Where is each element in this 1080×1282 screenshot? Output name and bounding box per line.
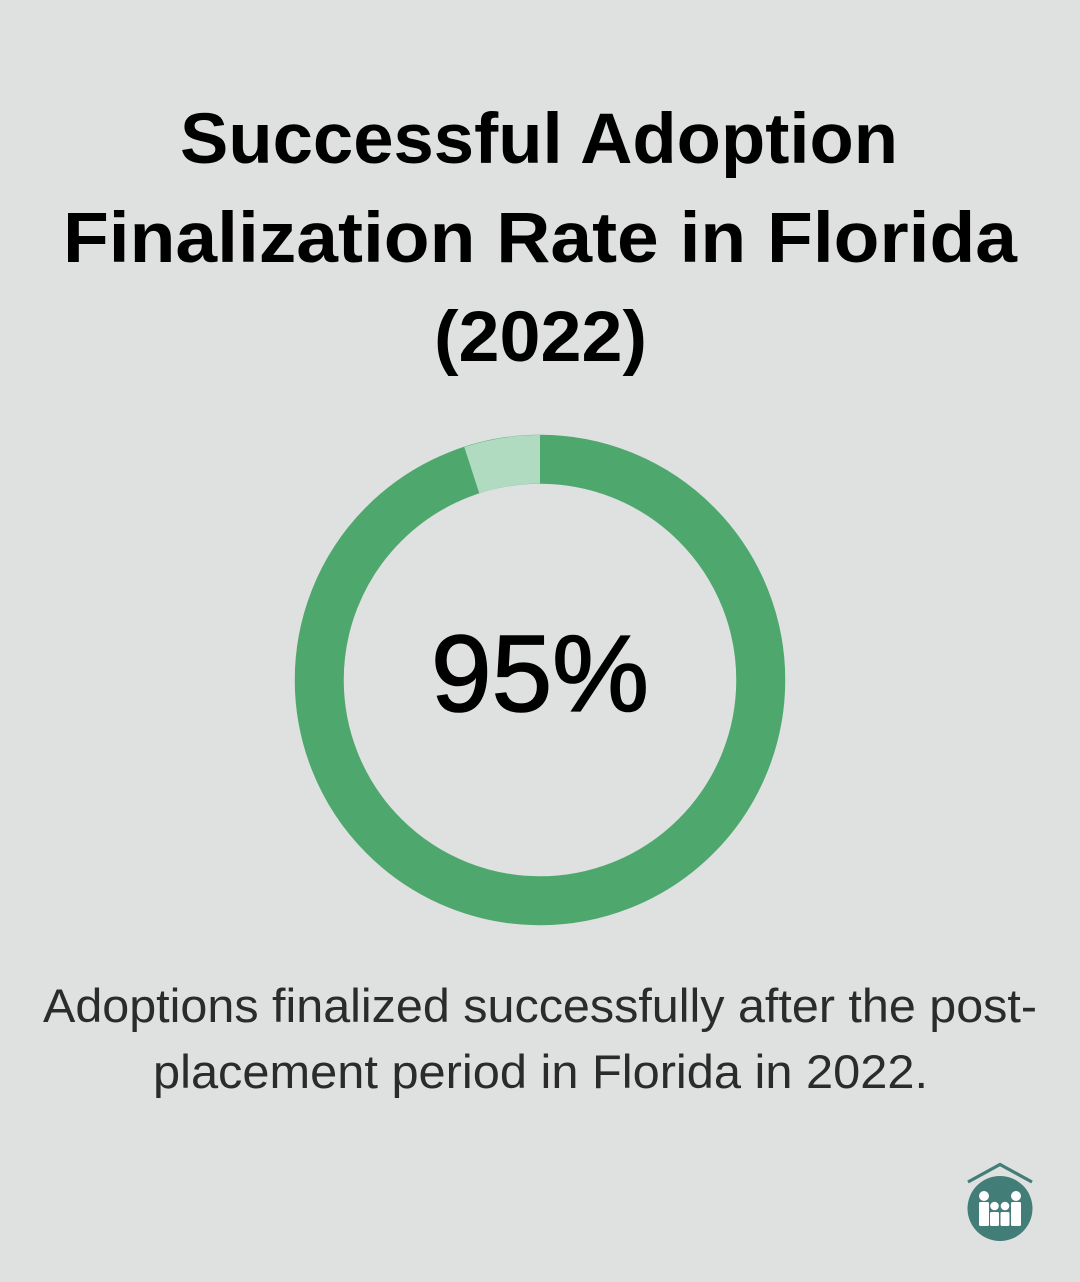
- description text: placement period in Florida in 2022.: [153, 1045, 928, 1098]
- donut remainder segment: 5%: [464, 435, 540, 493]
- title: Finalization Rate in Florida: [63, 199, 1018, 278]
- title: [63, 100, 1018, 377]
- donut chart: 95%: [319, 435, 761, 901]
- center value: 95%: [431, 613, 649, 735]
- title: Successful Adoption: [180, 100, 898, 179]
- description text: Adoptions finalized successfully after the post-: [43, 979, 1037, 1032]
- title: (2022): [434, 298, 647, 377]
- icon: family in house logo: [968, 1164, 1032, 1241]
- description text: [43, 979, 1037, 1098]
